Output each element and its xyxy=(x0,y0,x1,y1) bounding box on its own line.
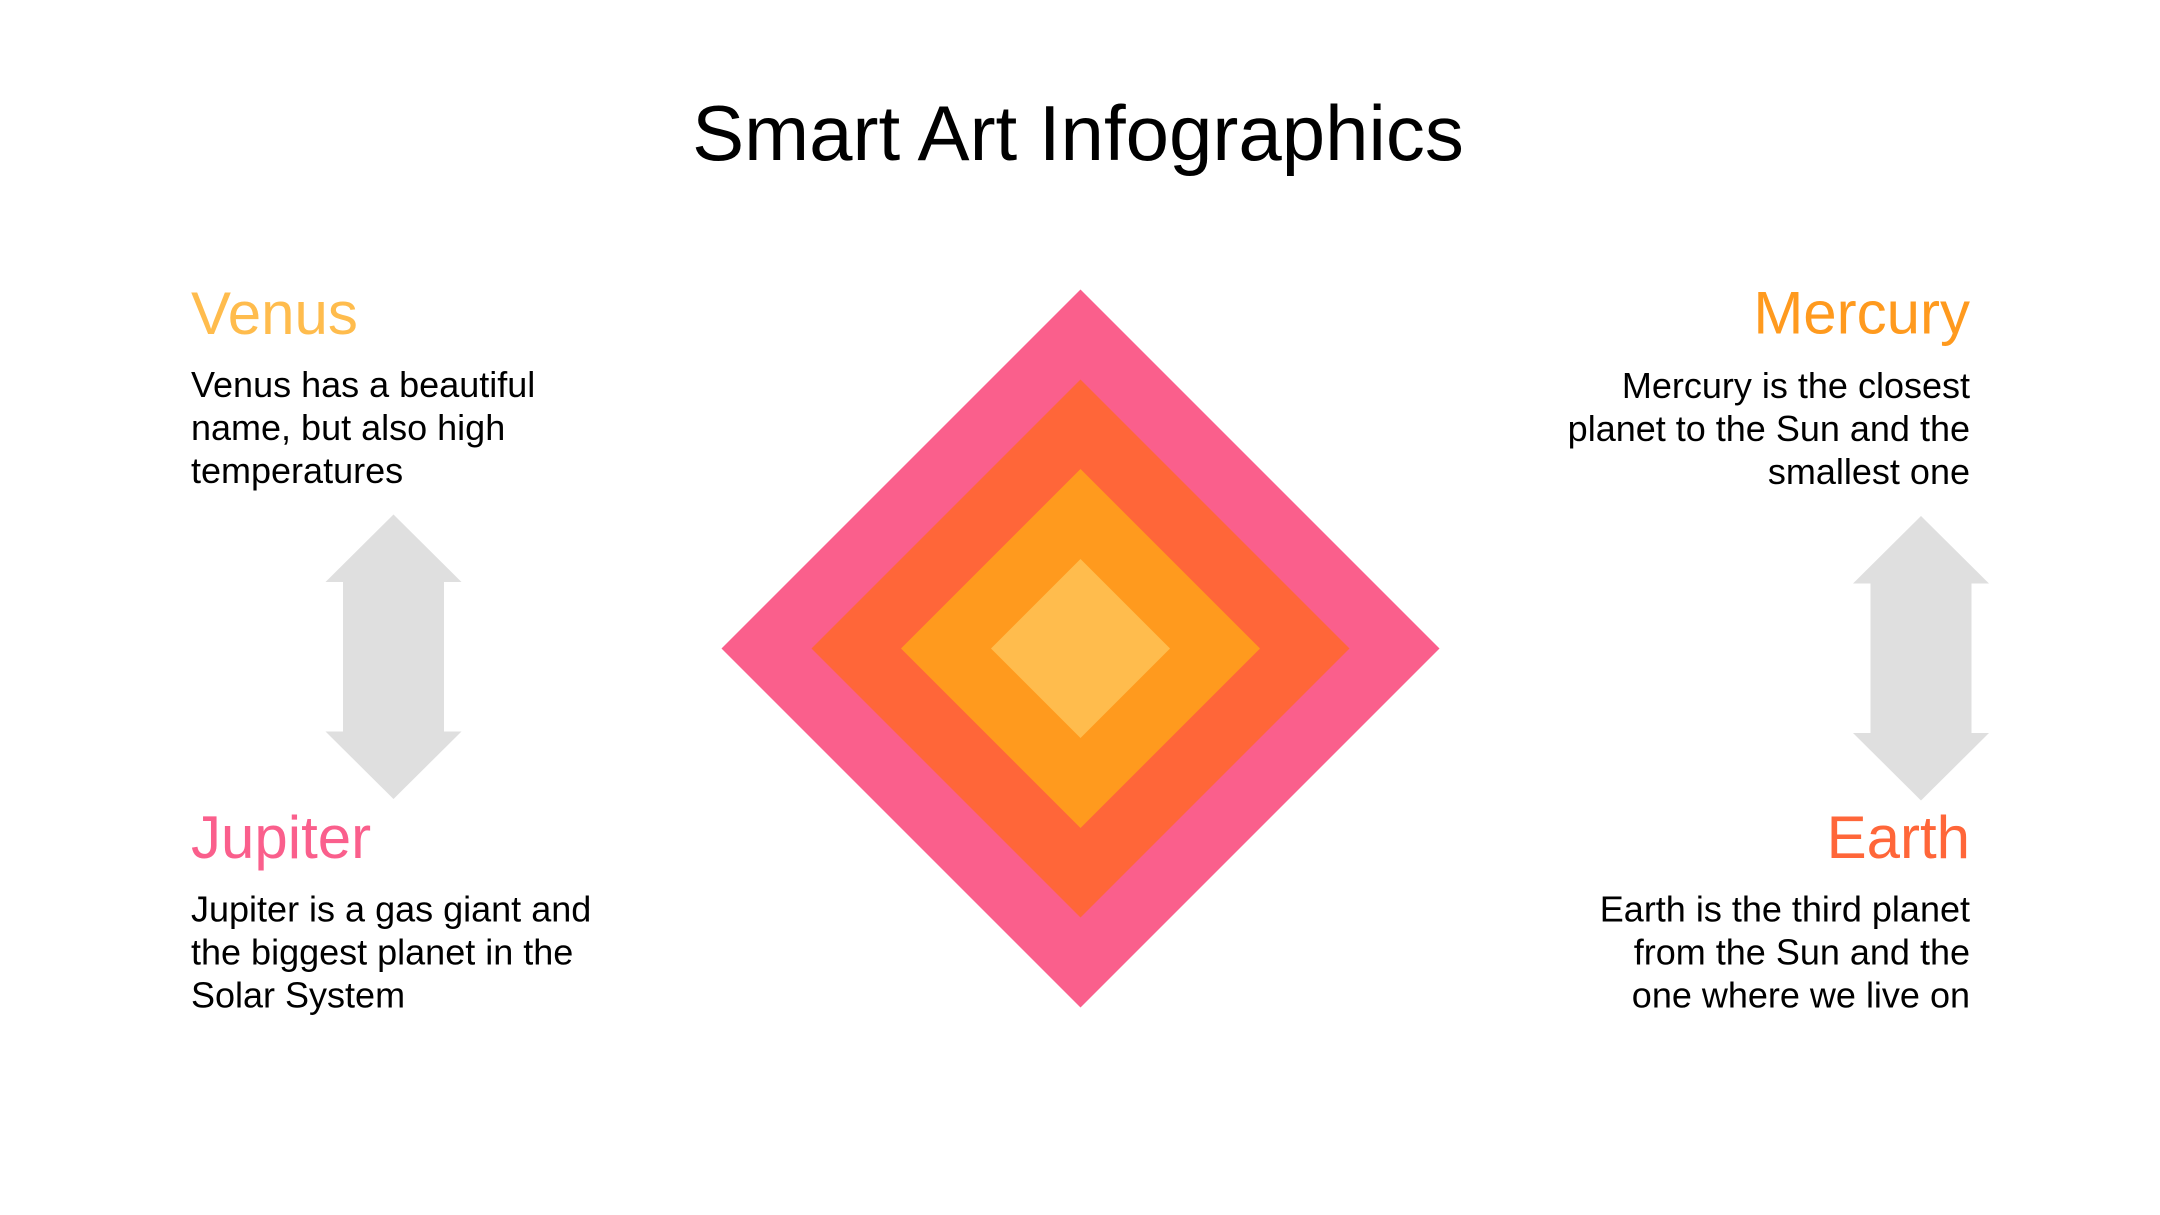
diamond: orange-red xyxy=(812,380,1350,918)
panel: Earth xyxy=(1600,804,1970,1016)
panel: Venus xyxy=(191,280,535,491)
heading: Earth: Earth xyxy=(1827,804,1970,871)
arrow: left double arrow xyxy=(326,514,462,799)
title: Smart Art Infographics xyxy=(692,89,1464,177)
diamond: orange xyxy=(901,469,1260,828)
text: Mercury description: Mercury is the closest xyxy=(1622,365,1970,406)
text: Earth description: one where we live on xyxy=(1632,974,1970,1016)
text: Jupiter description: Jupiter is a gas giant and xyxy=(191,888,591,930)
heading: Venus: Venus xyxy=(191,280,358,347)
panel: Jupiter xyxy=(191,804,591,1016)
panel: Mercury xyxy=(1568,280,1970,492)
text: Venus description: name, but also high xyxy=(191,407,505,448)
text: Jupiter description: the biggest planet in the xyxy=(191,932,573,972)
arrow: right double arrow xyxy=(1853,516,1989,800)
text: Earth description: Earth is the third planet xyxy=(1600,888,1970,930)
text: Mercury description: planet to the Sun and the xyxy=(1568,408,1970,449)
diamond: inner yellow xyxy=(991,559,1170,738)
text: Earth description: from the Sun and the xyxy=(1634,932,1970,972)
text: Jupiter description: Solar System xyxy=(191,974,405,1016)
text: Venus description: Venus has a beautiful xyxy=(191,364,535,405)
text: Venus description: temperatures xyxy=(191,450,403,491)
diamond: outer pink xyxy=(722,290,1440,1008)
heading: Mercury: Mercury xyxy=(1753,280,1970,346)
chart: nested diamonds xyxy=(722,290,1440,1008)
heading: Jupiter: Jupiter xyxy=(191,804,371,871)
text: Mercury description: smallest one xyxy=(1768,451,1970,492)
